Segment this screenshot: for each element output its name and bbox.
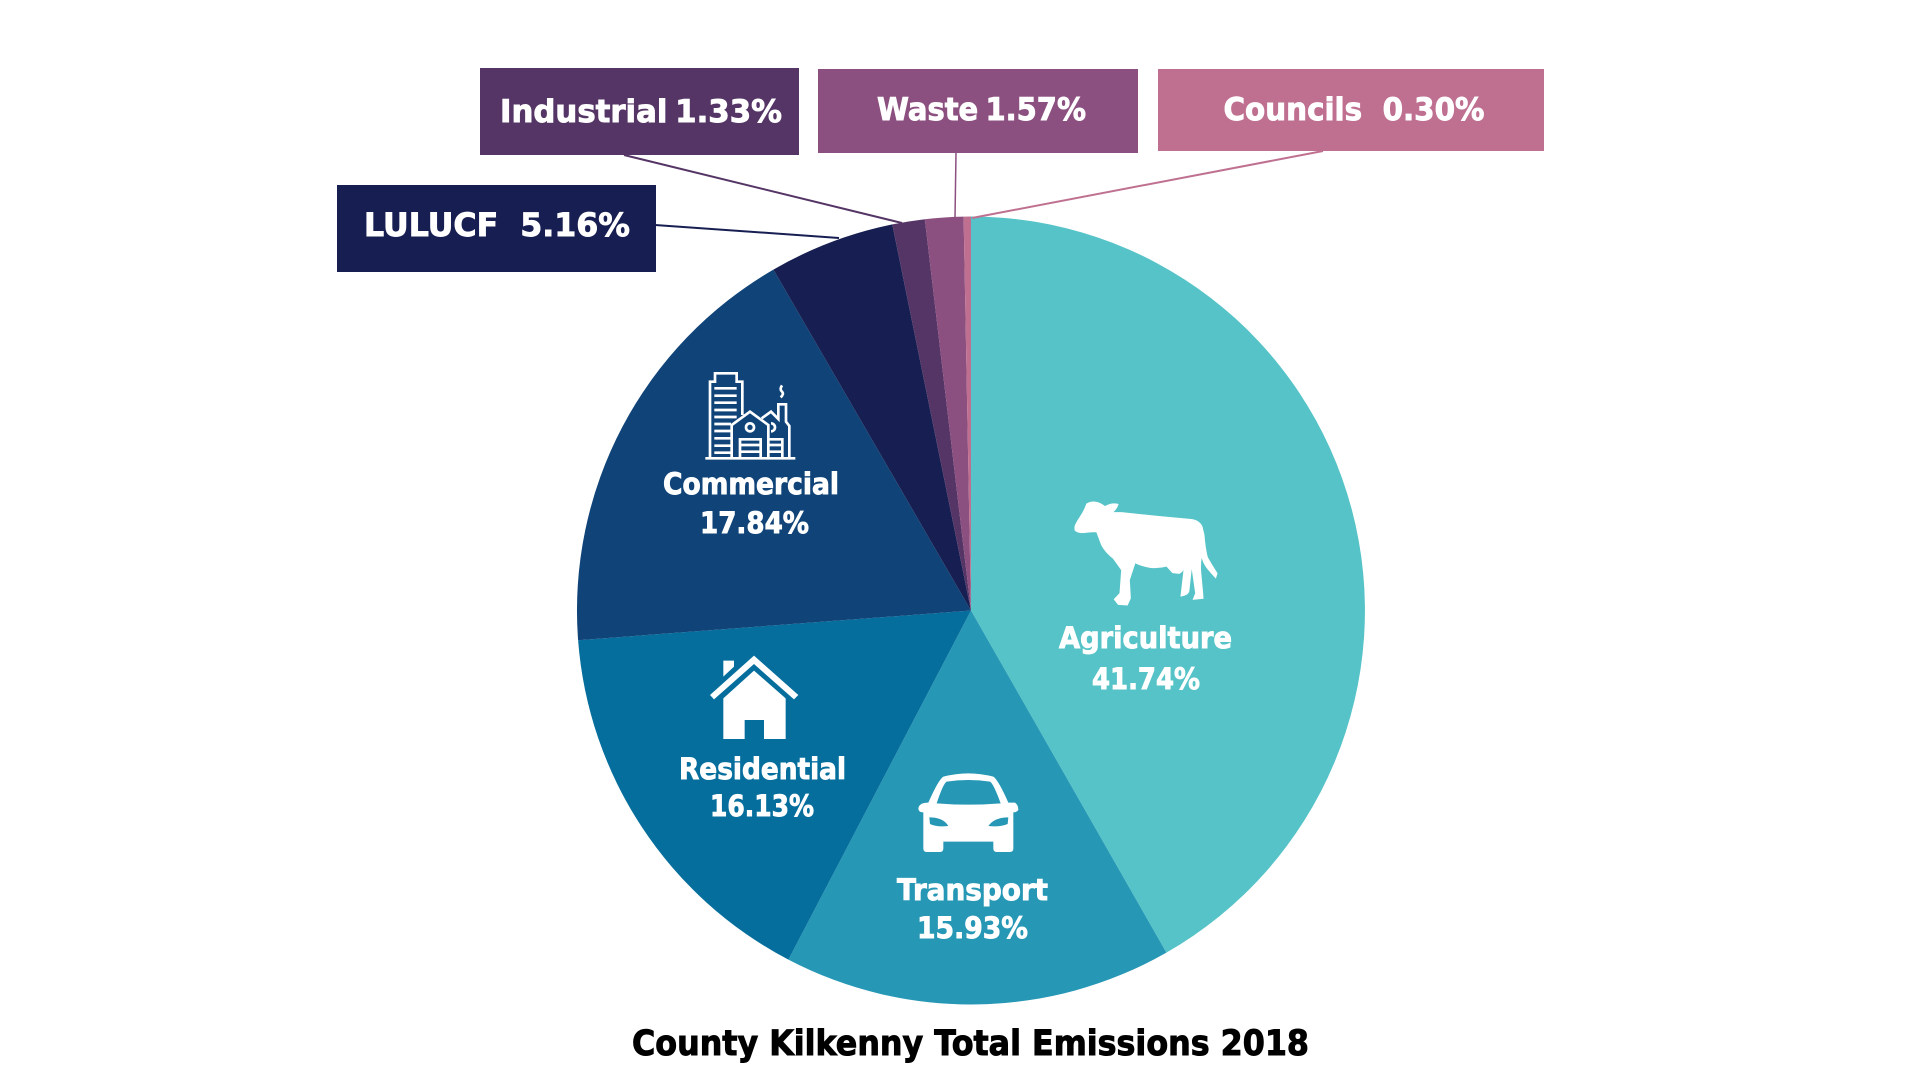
label: commercial: 17.84%: [700, 506, 809, 540]
slice: residential: [578, 610, 971, 960]
label: residential: 16.13%: [710, 789, 814, 823]
slice: commercial: [577, 270, 971, 640]
callout: LULUCF: [337, 185, 656, 272]
callout: councils: [1158, 69, 1544, 151]
label: commercial: [663, 467, 839, 540]
label: commercial: Commercial: [663, 467, 839, 501]
leader line: LULUCF: [655, 225, 839, 238]
pie chart: [577, 216, 1365, 1004]
label: transport: 15.93%: [917, 911, 1028, 945]
label: agriculture: [1059, 621, 1232, 696]
callout: industrial: Industrial 1.33%: [500, 94, 782, 130]
label: residential: [679, 752, 846, 823]
icon: cow: [1075, 502, 1217, 605]
icon: car: [918, 773, 1018, 852]
label: transport: [897, 873, 1048, 945]
callout: waste: Waste 1.57%: [877, 92, 1086, 128]
slice: LULUCF: [773, 224, 971, 610]
slice: industrial: [892, 219, 971, 610]
label: residential: Residential: [679, 752, 846, 786]
label: agriculture: Agriculture: [1059, 621, 1232, 655]
label: transport: Transport: [897, 873, 1048, 907]
callout: waste: [818, 69, 1138, 153]
label: agriculture: 41.74%: [1092, 662, 1200, 696]
leader line: councils: [972, 151, 1323, 218]
icon: house: [710, 656, 798, 739]
leader line: industrial: [624, 155, 902, 223]
icon: buildings: [705, 373, 795, 458]
slice: councils: [964, 216, 971, 610]
callout: LULUCF: LULUCF 5.16%: [364, 206, 630, 244]
slice: agriculture: [971, 216, 1365, 953]
slice: waste: [925, 217, 971, 610]
callout: industrial: [480, 68, 799, 155]
title: County Kilkenny Total Emissions 2018: [632, 1024, 1309, 1064]
leader line: waste: [955, 153, 956, 218]
slice: transport: [788, 610, 1166, 1004]
callout: councils: Councils 0.30%: [1224, 92, 1484, 128]
